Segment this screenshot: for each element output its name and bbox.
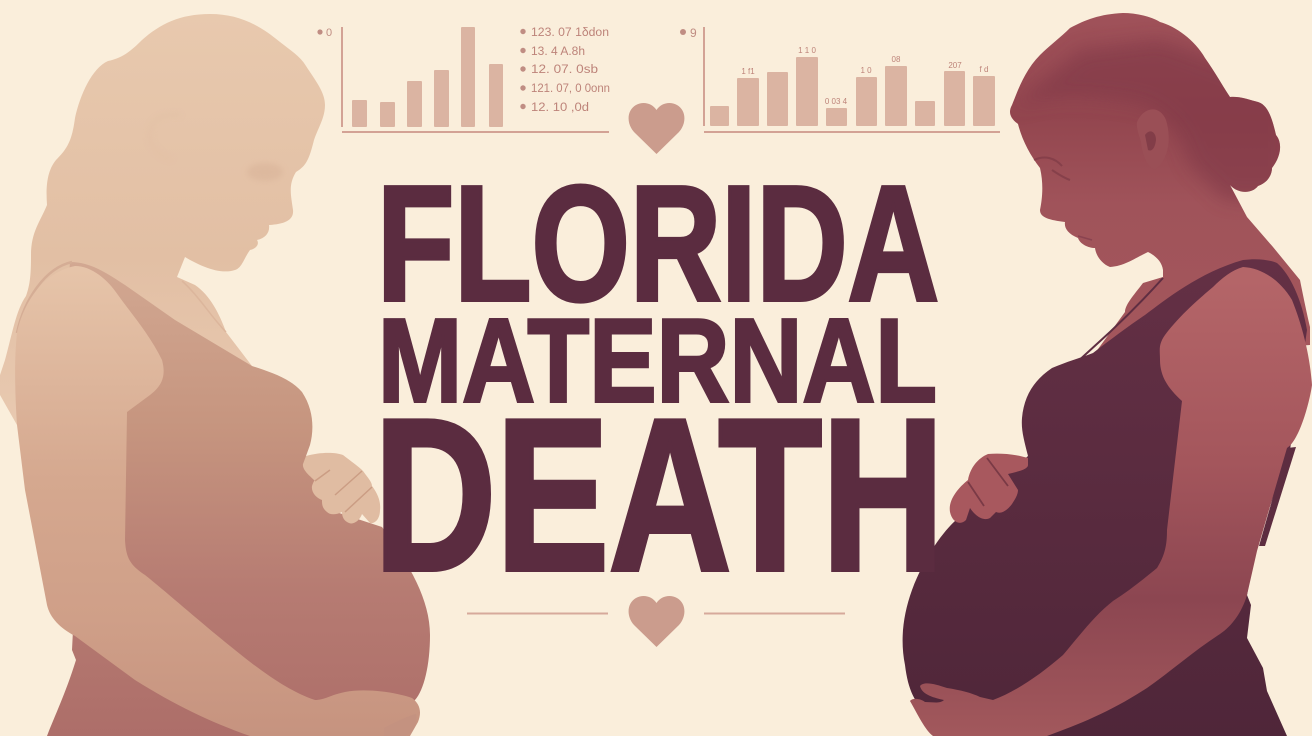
right chart: bar value labels: 1 f1 bbox=[741, 67, 755, 76]
left chart: bars bbox=[352, 27, 503, 127]
title line: FLORIDA: FLORIDA bbox=[377, 152, 939, 335]
right figure: mouth line bbox=[1078, 236, 1092, 240]
left figure: outer shoulder strap line bbox=[17, 262, 72, 333]
left figure: eye shadow bbox=[247, 163, 283, 181]
left chart: legend: 12. 07. 0sb bbox=[531, 64, 598, 76]
right figure: closed eye bbox=[1034, 158, 1070, 180]
right figure: arm and shoulder bbox=[910, 267, 1312, 736]
right figure: hair and bun shading bbox=[1010, 40, 1290, 200]
right chart: axes bbox=[704, 27, 1000, 132]
left figure: finger separation lines bbox=[315, 470, 372, 512]
right figure: finger separation lines bbox=[968, 458, 1008, 506]
left figure: ear bbox=[150, 114, 180, 158]
right figure: back dress edge bbox=[1259, 447, 1296, 546]
left figure: tank top and belly bbox=[47, 262, 430, 736]
right chart: axis label: 9 bbox=[690, 26, 697, 40]
right chart: bar value labels: 207 bbox=[948, 61, 962, 70]
right chart: bars bbox=[710, 57, 995, 126]
title line: MATERNAL: MATERNAL bbox=[378, 294, 937, 428]
right chart: bar value labels: 1 0 bbox=[860, 66, 872, 75]
left figure: lower hand fingers bbox=[384, 714, 416, 736]
bottom heart icon bbox=[629, 596, 684, 647]
top heart icon bbox=[629, 103, 684, 154]
right figure: head, face, bun, neck and chest bbox=[1010, 13, 1310, 360]
left chart: axis label: 0 bbox=[326, 27, 332, 39]
right figure: hand on belly bbox=[950, 454, 1028, 523]
left chart: legend: 12. 10 ,0d bbox=[531, 102, 589, 114]
right chart: bar value labels: 1 1 0 bbox=[798, 46, 816, 55]
left chart: legend: 123. 07 1δdon bbox=[531, 27, 609, 39]
left figure: thin chest strap line bbox=[182, 281, 226, 332]
right chart: bar value labels bbox=[741, 46, 988, 106]
left bar chart with legend bbox=[317, 27, 610, 132]
left chart: legend bbox=[520, 27, 610, 114]
left figure: hand on belly bbox=[303, 453, 380, 523]
right figure: inner ear shadow bbox=[1145, 131, 1156, 151]
left chart: axis label bbox=[317, 27, 332, 39]
left chart: axes bbox=[342, 27, 609, 132]
title line: DEATH: DEATH bbox=[374, 374, 944, 616]
left chart: legend: 13. 4 A.8h bbox=[531, 46, 585, 58]
right figure: dress torso and belly bbox=[903, 259, 1307, 736]
right bar chart bbox=[680, 26, 1000, 132]
right figure: ear bbox=[1137, 109, 1169, 170]
right chart: bar value labels: f d bbox=[980, 65, 988, 74]
right chart: bar value labels: 08 bbox=[892, 55, 901, 64]
left figure: arm and shoulder bbox=[15, 266, 420, 736]
title: Florida Maternal Death bbox=[374, 152, 944, 616]
right pregnant woman silhouette (dark) bbox=[903, 13, 1312, 736]
left figure: head, long hair, neck and chest bbox=[0, 14, 325, 425]
left chart: legend: 121. 07, 0 0onn bbox=[531, 83, 610, 95]
right chart: bar value labels: 0 03 4 bbox=[825, 97, 848, 106]
right figure: thin chest strap bbox=[1075, 278, 1163, 364]
right chart: axis label bbox=[680, 26, 697, 40]
left pregnant woman silhouette (light) bbox=[0, 14, 430, 736]
